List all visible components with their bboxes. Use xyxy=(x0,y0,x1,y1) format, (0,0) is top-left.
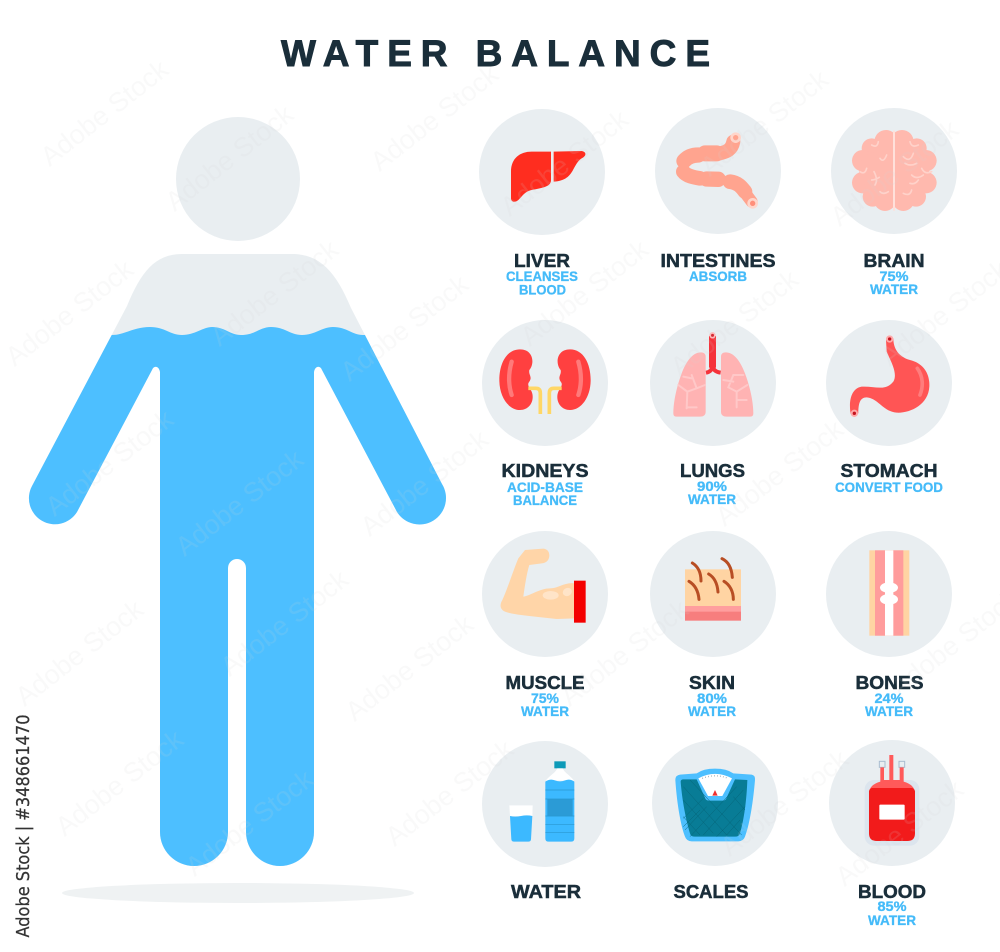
icon: blood bag xyxy=(865,755,919,846)
watermark pattern: Adobe Stock xyxy=(215,564,354,682)
caption: 75% water: 75% xyxy=(531,691,559,706)
caption: cleanses blood: BLOOD xyxy=(519,282,566,298)
panel: water xyxy=(482,741,608,902)
caption: 85% water: 85% xyxy=(878,899,906,914)
caption: 85% water xyxy=(868,899,916,928)
watermark pattern: Adobe Stock xyxy=(710,414,849,532)
panel: scales xyxy=(652,740,778,902)
water fill in body xyxy=(28,327,446,866)
stock image id: Adobe Stock | #348661470 xyxy=(13,714,34,938)
watermark pattern: Adobe Stock xyxy=(10,594,149,712)
label: lungs: LUNGS xyxy=(680,461,745,481)
label: kidneys: KIDNEYS xyxy=(502,461,588,481)
label: scales: SCALES xyxy=(674,882,748,902)
ground shadow xyxy=(62,883,414,903)
label: skin: SKIN xyxy=(689,673,735,693)
label: muscle: MUSCLE xyxy=(506,673,584,693)
label: intestines: INTESTINES xyxy=(660,251,776,271)
caption: 75% water: 75% xyxy=(880,269,908,284)
watermark pattern: Adobe Stock xyxy=(665,264,804,382)
icon background xyxy=(826,320,952,446)
panel: muscle xyxy=(482,531,608,719)
icon: brain xyxy=(852,130,937,211)
label: brain: BRAIN xyxy=(864,251,924,271)
panel: stomach xyxy=(826,320,952,495)
icon background xyxy=(482,531,608,657)
caption: 75% water xyxy=(870,269,918,297)
icon: liver xyxy=(511,151,585,202)
watermark pattern: Adobe Stock xyxy=(335,269,474,387)
caption: 80% water: 80% xyxy=(697,691,727,706)
panel: skin xyxy=(650,531,776,719)
icon: glass and bottle xyxy=(509,761,574,842)
caption: convert food: CONVERT FOOD xyxy=(835,480,943,495)
icon background xyxy=(482,741,608,867)
watermark pattern: Adobe Stock xyxy=(340,609,479,727)
figure head xyxy=(176,117,300,241)
caption: cleanses blood: CLEANSES xyxy=(506,269,578,284)
caption: 80% water xyxy=(688,691,736,719)
icon: skin xyxy=(685,559,741,621)
watermark pattern: Adobe Stock xyxy=(555,594,694,712)
watermark pattern: Adobe Stock xyxy=(35,54,174,172)
panel: liver xyxy=(479,109,605,298)
panel: intestines xyxy=(655,108,781,284)
caption: 75% water: WATER xyxy=(870,282,918,297)
watermark pattern: Adobe Stock xyxy=(205,234,344,352)
watermark pattern: Adobe Stock xyxy=(715,744,854,862)
icon: stomach xyxy=(850,336,929,416)
caption: 24% water: WATER xyxy=(865,704,913,719)
icon: kidneys xyxy=(499,349,591,414)
icon background xyxy=(652,740,778,866)
watermark pattern: Adobe Stock xyxy=(355,424,494,542)
watermark pattern: Adobe Stock xyxy=(40,404,179,522)
title: WATER BALANCE xyxy=(281,33,710,74)
caption: 75% water: WATER xyxy=(521,704,569,719)
watermark pattern: Adobe Stock xyxy=(160,99,299,217)
caption: 90% water: WATER xyxy=(688,492,736,507)
icon background xyxy=(829,740,955,866)
figure body outline xyxy=(29,254,446,866)
label: stomach: STOMACH xyxy=(840,461,938,481)
label: liver: LIVER xyxy=(514,251,570,271)
icon: bones xyxy=(869,550,909,636)
panel: lungs xyxy=(650,320,776,507)
caption: 90% water xyxy=(688,479,736,507)
caption: 80% water: WATER xyxy=(688,704,736,719)
caption: 75% water xyxy=(521,691,569,719)
watermark pattern: Adobe Stock xyxy=(825,114,964,232)
watermark pattern: Adobe Stock xyxy=(365,59,504,177)
caption: 90% water: 90% xyxy=(697,479,727,494)
caption: cleanses blood xyxy=(506,269,578,298)
caption: acid-base balance: BALANCE xyxy=(513,493,577,508)
watermark pattern: Adobe Stock xyxy=(495,104,634,222)
watermark pattern: Adobe Stock xyxy=(695,64,834,182)
icon background xyxy=(831,108,957,234)
icon background xyxy=(650,531,776,657)
caption: 24% water xyxy=(865,691,913,719)
watermark pattern: Adobe Stock xyxy=(515,234,654,352)
caption: 24% water: 24% xyxy=(874,691,904,706)
watermark pattern: Adobe Stock xyxy=(380,734,519,852)
watermark pattern: Adobe Stock xyxy=(170,444,309,562)
icon: muscle xyxy=(501,549,586,623)
watermark pattern: Adobe Stock xyxy=(180,764,319,882)
icon background xyxy=(650,320,776,446)
icon background xyxy=(826,531,952,657)
panel: kidneys xyxy=(482,320,608,508)
label: water: WATER xyxy=(511,882,581,902)
label: blood: BLOOD xyxy=(858,882,926,902)
caption: absorb: ABSORB xyxy=(689,269,747,284)
icon background xyxy=(482,320,608,446)
watermark pattern: Adobe Stock xyxy=(50,724,189,842)
icon background xyxy=(479,109,605,235)
watermark pattern: Adobe Stock xyxy=(830,774,969,892)
icon: bathroom scales xyxy=(675,769,755,841)
caption: acid-base balance: ACID-BASE xyxy=(507,480,583,495)
panel: brain xyxy=(831,108,957,297)
human figure with water level xyxy=(29,117,446,903)
panel: blood xyxy=(829,740,955,928)
label: bones: BONES xyxy=(856,673,924,693)
caption: acid-base balance xyxy=(507,480,583,508)
caption: 85% water: WATER xyxy=(868,913,916,928)
watermark pattern: Adobe Stock xyxy=(0,254,139,372)
icon background xyxy=(655,108,781,234)
icon: intestines xyxy=(683,134,757,207)
panel: bones xyxy=(826,531,952,719)
icon: lungs xyxy=(673,333,753,417)
